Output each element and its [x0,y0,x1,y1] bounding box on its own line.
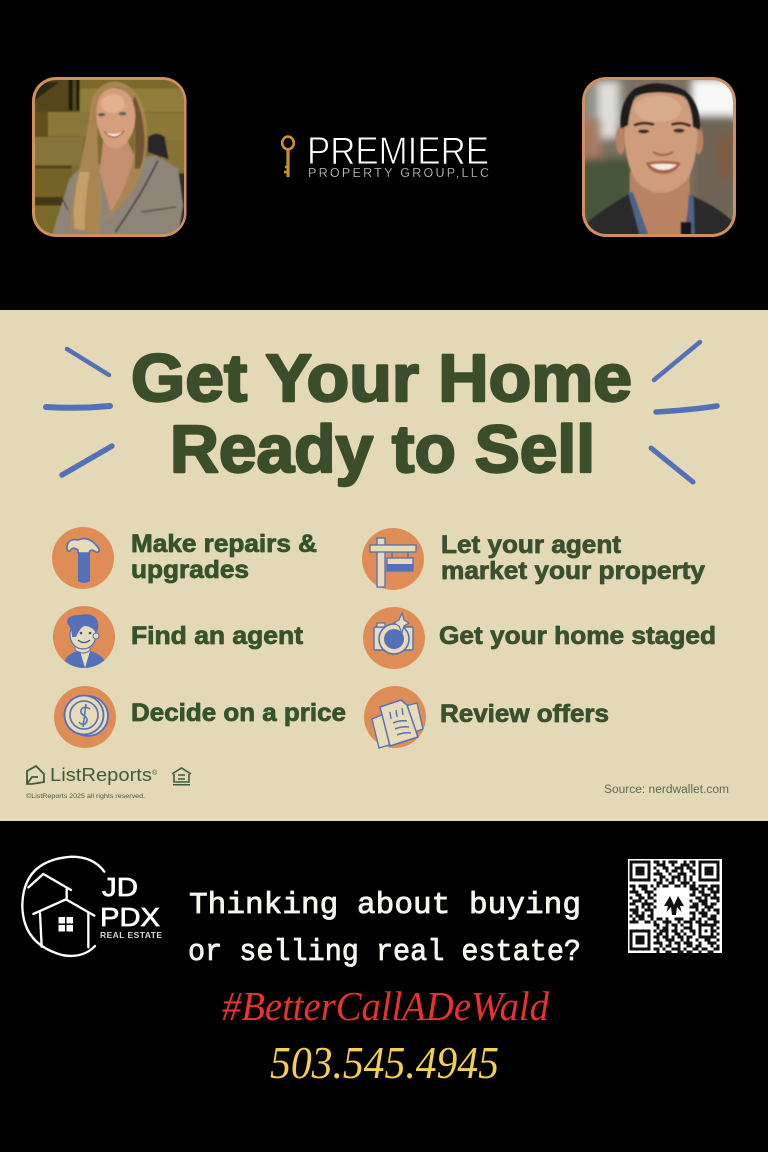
title: Get Your Home [131,341,632,416]
panel: get your home ready to sell [0,310,768,821]
wordmark: ListReports [50,764,152,785]
QR code [628,859,722,953]
step: let your agent market your property [362,528,705,590]
photo: left agent portrait [32,77,186,237]
step: decide on a price [54,686,346,748]
icon: hammer [52,527,114,589]
registered mark: ® [152,769,158,777]
step: get your home staged [363,607,716,669]
wordmark: JD: JD [102,872,138,902]
label: Find an agent [131,622,304,650]
label: Let your agent [441,531,622,559]
title [131,341,632,487]
icon: equal housing [172,768,191,786]
icon: ListReports house mark [27,766,44,784]
copyright: ©ListReports 2025 all rights reserved. [26,792,145,800]
icon: QR center arrows [664,896,684,915]
label: Review offers [440,700,609,728]
step: let your agent market your property: market your property [441,557,705,585]
call to action question: Thinking about buying [189,888,581,923]
phone number: 503.545.4945 [270,1037,499,1088]
source note: Source: nerdwallet.com [604,784,729,796]
wordmark: PDX: PDX [100,902,160,932]
logo: ListReports [26,764,191,800]
label: Get your home staged [439,622,716,650]
step: review offers [364,686,609,748]
icon: agent [53,606,115,668]
icon: coin [54,686,116,748]
step: make repairs and upgrades [52,527,317,589]
icon: offer papers [364,686,426,748]
hashtag: #BetterCallADeWald [222,983,549,1029]
step: make repairs and upgrades: upgrades [131,556,249,584]
logo: JD PDX Real Estate [22,857,162,956]
wordmark: Property Group: PROPERTY GROUP,LLC [308,166,489,180]
icon: gold key [282,137,294,177]
call to action question [188,888,581,970]
wordmark: Premiere: PREMIERE [307,130,489,173]
icon: circled houses [22,857,104,956]
icon: for-sale sign [362,528,424,590]
title: Ready to Sell [170,412,595,487]
step: find an agent [53,606,304,668]
label: Make repairs & [131,530,317,558]
icon: window [58,917,73,932]
logo: Premiere Property Group [282,130,489,180]
icon: camera [363,607,425,669]
label: Decide on a price [131,699,346,727]
decorative burst strokes: left and right of title [46,342,717,482]
call to action question: or selling real estate? [188,935,581,970]
photo: right agent portrait [582,77,736,237]
wordmark: real estate: REAL ESTATE [100,930,162,940]
